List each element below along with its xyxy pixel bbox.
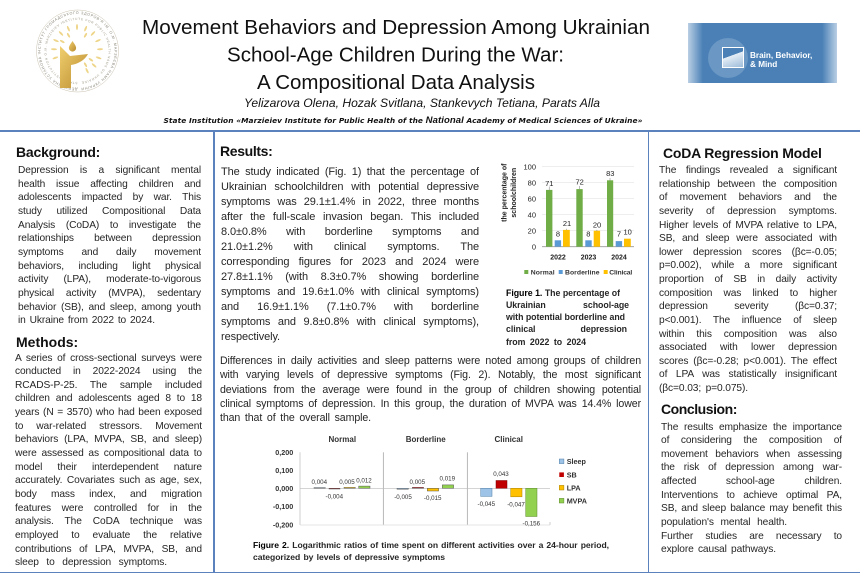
text: results part 1: The study indicated (Fig. 1) that the percentage of [221, 166, 479, 178]
panel: conclusion [661, 401, 842, 555]
caption: figure 1 [506, 288, 629, 347]
text: CoDA regression model [659, 165, 837, 394]
text: methods: children and adolescents aged 8 to 18 [15, 393, 202, 404]
text: methods: RCADS-P-25. The sample included [15, 380, 202, 391]
value labels: 0,005 [410, 479, 426, 486]
text: conclusion: affected school-age children. [661, 476, 842, 487]
value labels: 72 [576, 178, 584, 187]
heading: CoDA regression model: CoDA Regression Model [663, 145, 822, 161]
text: results part 1: 8.0±0.8% with borderline symptoms and [221, 226, 479, 238]
text: conclusion: Further studies are necessary to [661, 531, 842, 542]
legend: figure 1 [524, 270, 632, 276]
bars: clinical group [481, 480, 537, 516]
text: methods: behaviors (LPA, MVPA, SB, and sleep) [15, 434, 202, 445]
text: conclusion: population's mental health. [661, 517, 787, 528]
value labels: 71 [545, 179, 553, 188]
caption: figure 1: Figure 1. The percentage of [506, 288, 620, 298]
text: background: Depression is a significant mental [18, 165, 201, 176]
text: CoDA regression model: within this composition was also [659, 328, 837, 340]
text: CoDA regression model: scores (βc=-0.28; p<0.001). The effect [659, 356, 837, 367]
caption: figure 2: Figure 2. Logarithmic ratios of time spent on different activities over a 24-hour period, [253, 540, 609, 550]
y axis labels: 0,000 [275, 484, 293, 493]
value labels: 0,012 [356, 477, 372, 484]
text: CoDA regression model: relationship between the composition [659, 179, 837, 190]
text: results part 2: deviations from the average were found in the group of children showing potential [220, 384, 641, 396]
y axis title: schoolchildren [511, 168, 518, 218]
value labels: 0,019 [440, 476, 456, 482]
text: CoDA regression model: of LPA was statistically insignificant [659, 369, 837, 380]
value labels: -0,015 [424, 495, 442, 502]
value labels: 21 [563, 219, 571, 228]
legend: figure 1: Clinical [609, 270, 632, 276]
bars: normal group [314, 486, 370, 489]
text: methods [15, 352, 202, 568]
text: results part 1: 27.8±1.1% (with 8.3±0.7% showing borderline [221, 271, 479, 283]
text: background: health issue affecting children and [18, 179, 201, 190]
panel frame lines [0, 130, 860, 573]
text: CoDA regression model: Higher levels of MVPA relative to LPA, [659, 220, 837, 230]
heading: results: Results: [220, 143, 272, 159]
text: methods: analysis. The CoDA technique was [15, 516, 202, 527]
text: methods: features were controlled for in the [15, 503, 202, 514]
y axis labels: -0,200 [273, 520, 293, 530]
x axis labels: 2024 [611, 254, 627, 262]
text: CoDA regression model: (βc=0.03; p=0.075). [659, 383, 748, 394]
text: conclusion: explore causal pathways. [661, 544, 776, 555]
value labels: 8 [556, 230, 560, 239]
y axis labels: 0,100 [275, 466, 293, 475]
value labels [545, 169, 632, 239]
text: results part 1: Ukrainian schoolchildren with potential depressive [221, 181, 479, 193]
caption: figure 1: from 2022 to 2024 [506, 337, 586, 347]
text: CoDA regression model: depression severity (βc=0.37; [659, 301, 837, 312]
text: background: in Ukraine from 2022 to 2024. [18, 315, 155, 326]
y axis labels: 60 [528, 194, 536, 204]
legend: figure 2 [559, 457, 587, 505]
text: results part 1: after the full-scale invasion began. This included [221, 211, 479, 223]
text: results part 2 [220, 355, 641, 424]
group headers: Borderline [406, 435, 446, 444]
text: methods: model their interdependent nature [15, 462, 202, 473]
text: CoDA regression model: of movement behaviors and the [659, 192, 837, 203]
y axis labels: 0 [532, 242, 536, 252]
value labels: -0,156 [523, 520, 541, 528]
title: Movement Behaviors and Depression Among Ukrainian [142, 16, 650, 39]
value labels: -0,005 [394, 494, 412, 501]
text: methods: years (N = 3570) who had been exposed [15, 407, 202, 418]
authors: Yelizarova Olena, Hozak Svitlana, Stankevych Tetiana, Parats Alla [244, 96, 600, 110]
text: CoDA regression model: p=0.002), while a more significant [659, 260, 837, 271]
text: conclusion: the risk of depression among war- [661, 462, 842, 473]
text: results part 1: respectively. [221, 331, 280, 343]
legend: figure 2: LPA [567, 483, 581, 492]
x axis labels: 2022 [550, 254, 566, 262]
title: A Compositional Data Analysis [257, 71, 535, 94]
value labels: 10 [624, 227, 632, 236]
value labels: 7 [617, 230, 621, 239]
y axis labels: 80 [528, 178, 536, 188]
caption: figure 2: categorized by levels of depressive symptoms [253, 552, 445, 562]
y axis labels [273, 448, 293, 530]
text: results part 1: symptoms was 29.1±1.4% in 2022, three months [221, 196, 479, 208]
text: background: relationships between depression [18, 233, 201, 244]
text: conclusion: of considering the composition of [661, 435, 842, 446]
text: background: behavior (SB), and sleep, among youth [18, 302, 201, 313]
x axis labels [550, 254, 627, 262]
text: methods: sleep to depression symptoms. [15, 557, 167, 568]
heading: methods: Methods: [16, 334, 78, 350]
text: results part 1: and 16.9±1.1% (7.1±0.7% with borderline [221, 301, 479, 313]
y axis labels: -0,100 [273, 502, 293, 511]
title: School-Age Children During the War: [227, 44, 564, 66]
y axis labels: 40 [528, 210, 536, 220]
y axis labels: 100 [523, 162, 536, 172]
x axis labels: 2023 [581, 254, 596, 262]
value labels: 0,043 [493, 471, 509, 478]
group headers: Normal [329, 435, 356, 444]
text: background: Analysis (CoDA) to investigate the [18, 220, 201, 231]
bars: borderline group [397, 485, 454, 491]
text: methods: A series of cross-sectional surveys were [15, 352, 202, 364]
title [142, 16, 650, 94]
text: results part 1: corresponding figures for 2023 and 2024 were [221, 256, 479, 268]
text: CoDA regression model: severity of depression symptoms. [659, 206, 837, 217]
text: conclusion: Interventions to achieve optimal PA, [661, 490, 842, 501]
text: CoDA regression model: p<0.001). The influence of sleep [659, 315, 837, 326]
legend: figure 1: Borderline [565, 270, 600, 276]
value labels [312, 471, 541, 528]
text: conclusion: movement behaviors when assessing [661, 449, 842, 460]
heading: conclusion: Conclusion: [661, 401, 737, 417]
text: results part 1: symptoms and 9.8±0.8% with clinical symptoms), [221, 316, 479, 328]
caption: figure 1: with potential borderline and [506, 312, 625, 322]
text: results part 2: clinical symptoms of depression. In this group, the duration of MVPA was 14.4% lower [220, 398, 641, 410]
text: background: activity (LPA), moderate-to-vigorous [18, 274, 201, 285]
y axis title: the percentage of [502, 163, 508, 222]
text: results part 1: 21.0±1.2% with clinical symptoms. The [221, 241, 479, 253]
value labels: 8 [586, 230, 590, 239]
logo: institute seal: ДЕРЖАВНА УСТАНОВА ІНСТИТУТ ГРОМАДСЬКОГО ЗДОРОВ'Я ІМ. О.М. МАРЗЄЄВА НАМН УКРАЇНИ [38, 11, 118, 90]
text: results part 2: than that of the overall sample. [220, 412, 371, 424]
bars: normal [546, 180, 613, 247]
logo: Brain, Behavior, & Mind: Brain, Behavior, [750, 51, 812, 60]
text: results part 1: symptoms and 19.6±1.0% with clinical symptoms) [221, 286, 479, 298]
text: background: study utilized Compositional Data [18, 206, 201, 217]
legend: figure 1: Normal [531, 270, 555, 276]
logo: institute seal: STATE INSTITUTION O.M. MARZIEIEV INSTITUTE FOR PUBLIC HEALTH NAMS OF UKRAINE [44, 18, 111, 84]
text: methods: contributions of LPA, MVPA, SB, and [15, 544, 202, 555]
text: CoDA regression model: composition was linked to higher [659, 288, 837, 299]
text: CoDA regression model: SB, and sleep were associated with [659, 233, 837, 244]
bars: borderline [555, 240, 622, 247]
text: results part 2: with varying levels of depressive symptoms (Fig. 2). Notably, the most significant [220, 369, 641, 381]
panel: methods [15, 334, 202, 568]
y axis labels: 0,200 [275, 448, 293, 457]
value labels: 83 [606, 169, 614, 178]
text: background: behaviors, including light physical [18, 261, 201, 272]
panel: CoDA regression model [659, 145, 837, 394]
text: background: adolescents impacted by war. This [18, 192, 201, 203]
panel: background [16, 144, 201, 326]
text: methods: were assessed as compositional data to [15, 448, 202, 459]
text: conclusion: The results emphasize the importance [661, 422, 842, 432]
text: CoDA regression model: associated with lower depression [659, 342, 837, 353]
panel: results [220, 143, 479, 343]
heading: background: Background: [16, 144, 100, 160]
value labels: -0,047 [507, 502, 525, 508]
y axis labels [523, 162, 536, 252]
text: CoDA regression model: proportion of SB in daily activity [659, 274, 837, 285]
text: methods: accurately. Covariates such as age, sex, [15, 475, 202, 486]
y axis title [502, 163, 518, 222]
legend: figure 2: MVPA [567, 496, 587, 505]
text: results part 1 [221, 166, 479, 343]
legend: figure 2: SB [567, 470, 577, 479]
bars: clinical [563, 230, 631, 247]
value labels: 20 [593, 220, 601, 229]
value labels: 0,005 [339, 479, 355, 486]
legend: figure 2: Sleep [567, 457, 586, 466]
value labels: -0,004 [326, 494, 344, 500]
group headers: Clinical [494, 435, 523, 444]
value labels: 0,004 [312, 479, 328, 486]
text: CoDA regression model: The findings revealed a significant [659, 165, 837, 176]
text: methods: body mass index, and migration [15, 489, 202, 500]
text: CoDA regression model: lower depression scores (βc=-0.05; [659, 247, 837, 258]
error bars [549, 178, 610, 231]
text: methods: conducted in 2022-2024 using the [15, 366, 202, 377]
text: results part 2: Differences in daily activities and sleep patterns were noted among groups of children [220, 355, 641, 367]
text: background: symptoms and daily movement [18, 247, 201, 258]
caption: figure 2 [253, 540, 609, 562]
y axis labels: 20 [528, 226, 536, 236]
text: background: physical activity (MVPA), sedentary [18, 288, 201, 299]
value labels: -0,045 [478, 501, 496, 508]
logo: Brain, Behavior, & Mind [688, 23, 837, 83]
text: methods: to war-related stressors. Movement [15, 421, 202, 432]
group headers [329, 435, 523, 444]
text: conclusion [661, 422, 842, 555]
affiliation: State Institution «Marzieiev Institute for Public Health of the National Academy of Medical Sciences of Ukraine» [163, 115, 642, 126]
text: background [18, 165, 201, 326]
text: conclusion: SB, and sleep balance may benefit this [661, 503, 842, 514]
logo: Brain, Behavior, & Mind: & Mind [750, 60, 777, 69]
text: methods: employed to evaluate the relative [15, 530, 202, 541]
